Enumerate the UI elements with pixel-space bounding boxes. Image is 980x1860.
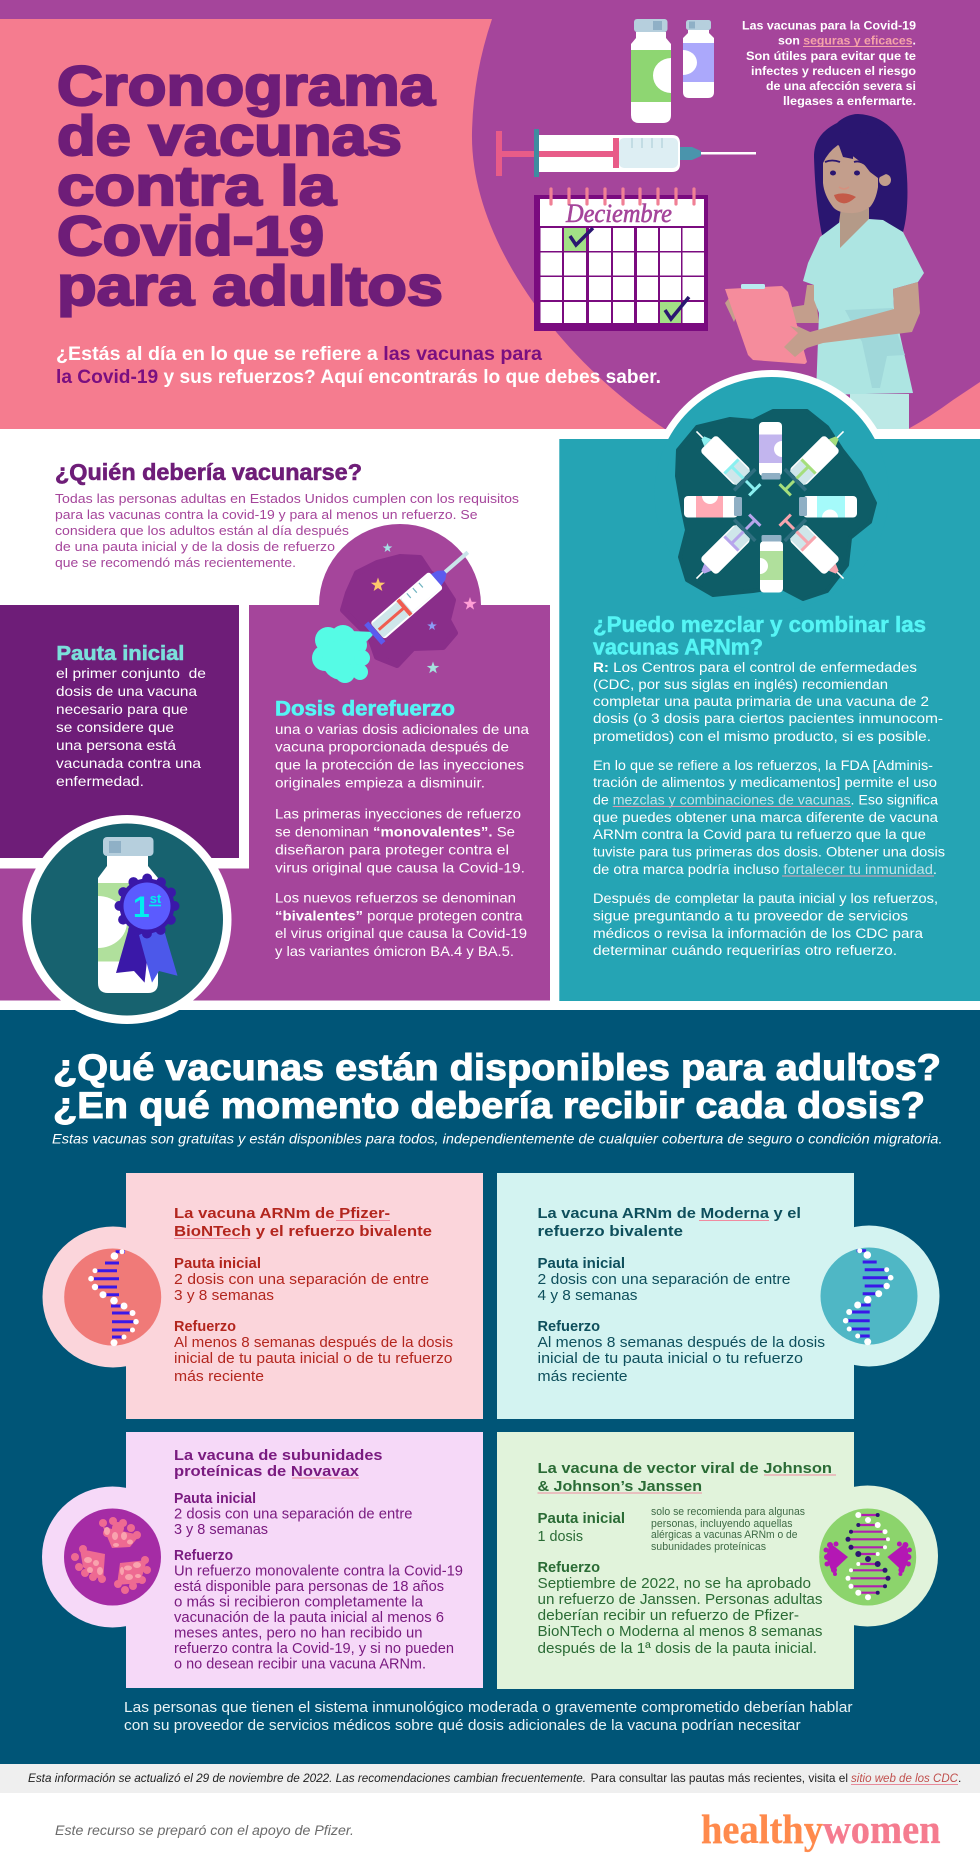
text: who body [55,491,520,570]
footer note: Esta información se actualizó el 29 de noviembre de 2022. Las recomendaciones cambian frecuentemente. [28,1771,586,1785]
heading: mix and match: ¿Puedo mezclar y combinar las [593,612,926,637]
text: mix and match body: que puedes obtener una marca diferente de vacuna [593,810,939,825]
intro note: Las vacunas para la Covid-19 [742,18,916,32]
text: Pfizer card: Al menos 8 semanas después de la dosis [174,1334,453,1351]
text: who body: de una pauta inicial y de la dosis de refuerzo [55,539,335,554]
text: Janssen card: personas, incluyendo aquellas [651,1518,793,1530]
text: Janssen card: alérgicas a vacunas ARNm o de [651,1529,798,1541]
text: primary series body: el primer conjunto de [56,665,206,681]
header panel [0,0,980,429]
illustration: nurse [725,114,924,430]
text: Pfizer card: inicial de tu pauta inicial o de tu refuerzo [174,1350,452,1367]
text: Moderna card: refuerzo bivalente [538,1223,683,1240]
text: mix and match body: tración de alimentos y medicamentos] permite el uso [593,775,937,790]
text: Novavax card: 2 dosis con una separación de entre [174,1506,412,1523]
text: Moderna card: inicial de tu pauta inicial o tu refuerzo [538,1350,803,1367]
intro note: infectes y reducen el riesgo [751,64,916,78]
text: Novavax card: o no desean recibir una vacuna ARNm. [174,1655,426,1672]
panel: who should get vaccinated [0,429,980,1010]
panel: mix and match [559,370,980,1001]
panel: primary series [0,605,239,858]
text: mix and match body: Después de completar la pauta inicial y los refuerzos, [593,891,938,906]
text: Novavax card: vacunación de la pauta inicial al menos 6 [174,1609,444,1626]
text: mix and match body: determinar cuándo requerirías otro refuerzo. [593,943,897,958]
footer note: sitio web de los CDC [851,1771,958,1785]
text: Moderna card: 4 y 8 semanas [538,1287,638,1304]
intro note: llegases a enfermarte. [783,94,916,108]
sponsor credit: Este recurso se preparó con el apoyo de Pfizer. [55,1823,354,1838]
text: who body: considera que los adultos están al día después [55,523,350,538]
footer note: . [958,1771,961,1785]
text: mix and match body: de otra marca podría incluso fortalecer tu inmunidad . [593,862,937,877]
text: mix and match body: médicos o revisa la información de los CDC para [593,926,924,941]
text: Janssen card: solo se recomienda para algunas [651,1506,805,1518]
text: mix and match body: prometidos) con el mismo producto, si es posible. [593,729,931,744]
text: primary series body: vacunada contra una [56,755,201,771]
text: primary series body: se considere que [56,719,174,735]
icon: calendar [534,189,708,331]
icon: vials and syringes [677,411,875,599]
card: Moderna [497,1173,940,1419]
text: Pfizer card: La vacuna ARNm de Pfizer- [174,1205,390,1222]
text: Pfizer card: 2 dosis con una separación de entre [174,1271,429,1288]
text: booster body: “bivalentes” porque protegen contra [275,908,523,924]
icon: protein subunits [64,1508,161,1606]
text: Janssen card: después de la 1ª dosis de la pauta inicial. [538,1640,817,1657]
text: immunocompromised note: Las personas que tienen el sistema inmunológico moderada o gravemente comprometido deberían hablar [124,1699,853,1716]
text: Novavax card: Pauta inicial [174,1490,256,1507]
text: Novavax card: Refuerzo [174,1547,233,1564]
heading: mix and match [593,612,926,660]
panel: booster dose [0,524,550,1000]
text: Janssen card: un refuerzo de Janssen. Personas adultas [538,1591,822,1608]
text: booster body: y las variantes ómicron BA.4 y BA.5. [275,943,514,959]
text: booster body: se denominan “monovalentes”. Se [275,823,515,839]
text: Novavax card: Un refuerzo monovalente contra la Covid-19 [174,1563,463,1580]
title: Cronograma [57,54,436,117]
text: booster body: Las primeras inyecciones de refuerzo [275,806,521,822]
icon: viral vector DNA [819,1508,916,1606]
calendar month: Deciembre [565,199,672,228]
icon: syringe [496,129,756,177]
text: Moderna card [538,1205,825,1385]
text: immunocompromised note: con su proveedor de servicios médicos sobre qué dosis adicionales de la vacuna podrían necesitar [124,1717,801,1734]
title: contra la [57,154,337,217]
text: Novavax card: 3 y 8 semanas [174,1521,268,1538]
intro note: son seguras y eficaces. [778,34,916,48]
heading: mix and match: vacunas ARNm? [593,634,763,660]
text: immunocompromised note [124,1699,853,1734]
header subtitle: ¿Estás al día en lo que se refiere a las vacunas para [56,343,542,365]
icon: DNA pink [64,1248,161,1346]
text: Pfizer card: Pauta inicial [174,1255,261,1272]
title [57,54,443,317]
card: Janssen [497,1432,938,1689]
heading: who: ¿Quién debería vacunarse? [55,459,362,485]
icon: booster syringe [312,542,477,683]
heading: booster: Dosis derefuerzo [275,698,455,720]
text: booster body: virus original que causa la Covid-19. [275,859,525,875]
text: Janssen card: Pauta inicial [538,1510,625,1527]
header subtitle: la Covid-19 y sus refuerzos? Aquí encontrarás lo que debes saber. [56,366,661,388]
text: mix and match body: ARNm contra la Covid para tu refuerzo que la que [593,827,926,842]
icon: first dose vial badge [22,815,232,1024]
text: booster body: vacuna proporcionada después de [275,738,509,754]
text: Novavax card: proteínicas de Novavax [174,1463,360,1480]
text: mix and match body: En lo que se refiere a los refuerzos, la FDA [Adminis- [593,758,933,773]
text: booster body: diseñaron para proteger contra el [275,841,509,857]
text: Pfizer card [174,1205,453,1385]
footer note: Para consultar las pautas más recientes, visita el [591,1771,848,1785]
text: Janssen card: La vacuna de vector viral de Johnson [538,1460,832,1477]
panel: available vaccines [0,1010,980,1764]
text: Moderna card: 2 dosis con una separación de entre [538,1271,790,1288]
text: mix and match body: completar una pauta primaria de una vacuna de 2 [593,694,929,709]
badge text: 1 [133,891,150,924]
text: booster body: que la protección de las inyecciones [275,756,524,772]
text: who body: para las vacunas contra la covid-19 y para al menos un refuerzo. Se [55,507,478,522]
heading: available vaccines: ¿Qué vacunas están disponibles para adultos? [53,1047,941,1088]
text: Pfizer card: más reciente [174,1368,264,1385]
text: Janssen card: & Johnson’s Janssen [538,1478,702,1495]
text: booster body: Los nuevos refuerzos se denominan [275,890,516,906]
text: Janssen card [538,1460,836,1657]
title: Covid-19 [57,204,324,267]
text: Pfizer card: Refuerzo [174,1318,236,1335]
text: mix and match body: sigue preguntando a tu proveedor de servicios [593,908,908,924]
text: mix and match body: tuviste para tus primeras dos dosis. Obtener una dosis [593,844,945,860]
text: primary series body: una persona está [56,737,176,753]
text: mix and match body: de mezclas y combinaciones de vacunas . Eso significa [593,792,939,808]
text: Moderna card: La vacuna ARNm de Moderna y el [538,1205,801,1222]
text: primary series body [56,665,206,789]
intro note: de una afección severa si [766,79,916,93]
text: Janssen card: subunidades proteínicas [651,1541,766,1553]
text: Moderna card: más reciente [538,1368,628,1385]
icon: small purple vial [683,20,714,98]
title: de vacunas [57,104,402,167]
text: booster body: una o varias dosis adicionales de una [275,721,529,737]
badge text: st [150,891,162,906]
text: Novavax card: o más si recibieron completamente la [174,1594,424,1611]
heading: primary series: Pauta inicial [56,642,184,665]
text: mix and match body: (CDC, por sus siglas en inglés) recomiendan [593,677,888,692]
clipboard [725,286,807,364]
text: booster body [275,721,529,959]
text: Janssen card: BioNTech o Moderna al menos 8 semanas [538,1623,822,1640]
text: mix and match body: dosis (o 3 dosis para ciertos pacientes inmunocom- [593,711,943,726]
text: Pfizer card: BioNTech y el refuerzo bivalente [174,1223,432,1240]
text: Novavax card: meses antes, pero no han recibido un [174,1625,422,1642]
header subtitle [56,343,661,388]
text: Janssen card: deberían recibir un refuerzo de Pfizer- [538,1607,799,1624]
text: mix and match body [593,660,945,958]
text: who body: que se recomendó más recientemente. [55,555,296,570]
card: Novavax [42,1432,483,1688]
heading: available vaccines [53,1047,941,1126]
icon: DNA teal [820,1248,918,1345]
heading: available vaccines: ¿En qué momento debería recibir cada dosis? [53,1085,925,1126]
text: Novavax card: La vacuna de subunidades [174,1447,382,1464]
text: Janssen card: Septiembre de 2022, no se ha aprobado [538,1575,811,1592]
text: Moderna card: Pauta inicial [538,1255,625,1272]
text: free vaccines note: Estas vacunas son gratuitas y están disponibles para todos, independientemente de cualquier cobertura de seguro o condición migratoria. [52,1130,942,1146]
text: Janssen card: 1 dosis [538,1528,583,1545]
text: who body: Todas las personas adultas en Estados Unidos cumplen con los requisitos [55,491,520,506]
text: Janssen card: Refuerzo [538,1559,600,1576]
title: para adultos [57,254,443,317]
intro note [742,18,916,108]
text: Moderna card: Al menos 8 semanas después de la dosis [538,1334,825,1351]
text: Moderna card: Refuerzo [538,1318,600,1335]
icon: large green vial [631,19,671,123]
intro note: Son útiles para evitar que te [746,49,916,63]
text: booster body: el virus original que causa la Covid-19 [275,925,527,941]
card: Pfizer [42,1173,483,1419]
text: primary series body: enfermedad. [56,773,144,789]
text: primary series body: dosis de una vacuna [56,683,197,699]
text: booster body: originales empieza a disminuir. [275,774,485,790]
footer note [0,1764,980,1793]
text: primary series body: necesario para que [56,701,188,717]
text: Novavax card: está disponible para personas de 18 años [174,1578,444,1595]
text: Pfizer card: 3 y 8 semanas [174,1287,274,1304]
text: Novavax card: refuerzo contra la Covid-19, y si no pueden [174,1640,454,1657]
text: mix and match body: R: Los Centros para el control de enfermedades [593,660,917,675]
text: Novavax card [174,1447,463,1672]
logo: healthywomen: healthywomen [701,1806,941,1852]
